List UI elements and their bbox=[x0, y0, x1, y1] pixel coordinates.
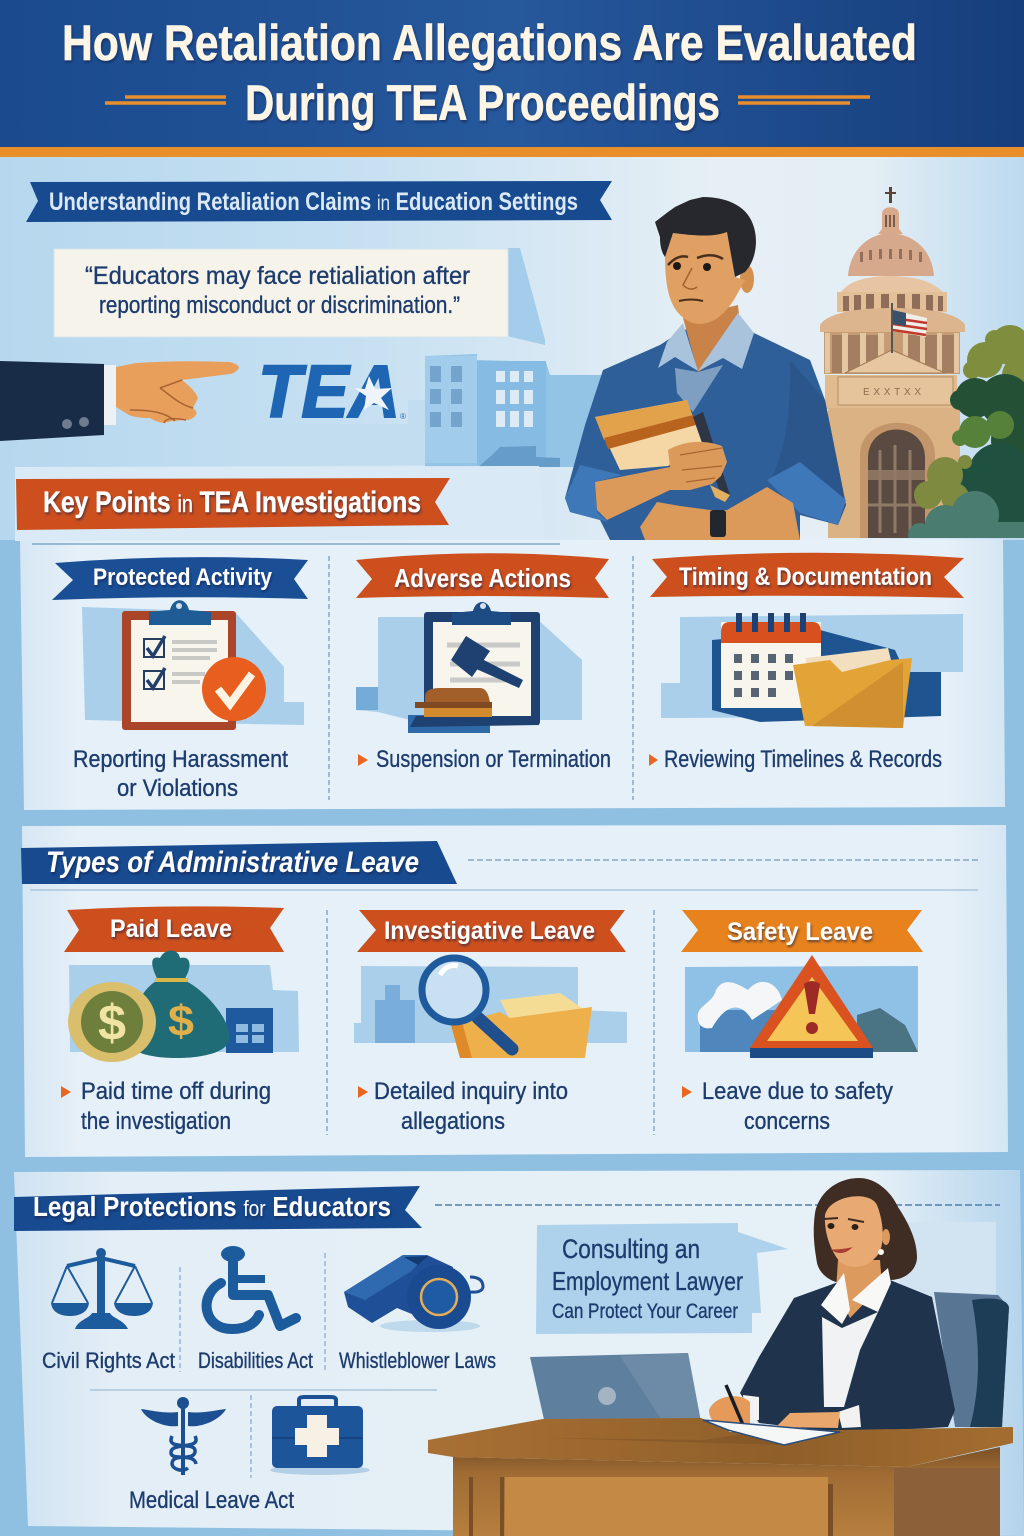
watch bbox=[710, 510, 726, 537]
blouse bbox=[822, 1312, 878, 1407]
capitol building: EXXTXX bbox=[863, 387, 921, 398]
ribbon bbox=[650, 553, 964, 598]
face bbox=[665, 230, 745, 324]
caption: Medical Leave Act bbox=[129, 1487, 294, 1514]
collar bbox=[658, 313, 754, 371]
caption: Whistleblower Laws bbox=[339, 1348, 496, 1373]
TEA logo: ® bbox=[400, 412, 406, 421]
caption: or Violations bbox=[117, 775, 238, 802]
caption: Disabilities Act bbox=[198, 1348, 313, 1373]
column: adverse actions bbox=[356, 553, 611, 773]
neck bbox=[836, 1260, 882, 1318]
caption: Leave due to safety bbox=[702, 1078, 893, 1105]
ear bbox=[740, 265, 754, 293]
callout: consulting a lawyer: Can Protect Your Career bbox=[552, 1300, 738, 1323]
section ribbon: understanding retaliation claims: Understanding Retaliation Claims in Education Settings bbox=[49, 188, 578, 216]
ribbon bbox=[681, 910, 923, 952]
title header bbox=[0, 0, 1024, 157]
jacket bbox=[740, 1280, 955, 1433]
icon: wheelchair bbox=[207, 1246, 296, 1329]
icon: magnifier and folder bbox=[354, 958, 627, 1058]
flag bbox=[891, 303, 893, 353]
icon: clipboard checklist bbox=[82, 600, 304, 730]
base and arch bbox=[828, 408, 960, 538]
arrow bullet bbox=[358, 1086, 368, 1098]
left cuff bbox=[565, 465, 622, 522]
ribbon: key points heading bbox=[16, 478, 450, 530]
icon: money bag and coin: $ bbox=[168, 997, 194, 1046]
face bbox=[825, 1196, 883, 1267]
icon: money bag and coin bbox=[68, 950, 299, 1062]
drum bbox=[837, 292, 947, 312]
ribbon: types heading bbox=[21, 841, 457, 884]
caption: Civil Rights Act bbox=[42, 1348, 175, 1373]
face details bbox=[668, 255, 723, 301]
quote card: “Educators may face retialiation after bbox=[85, 262, 470, 290]
arrow bullet bbox=[682, 1086, 692, 1098]
book bbox=[595, 400, 702, 470]
caption bbox=[81, 1078, 271, 1135]
column: timing and documentation bbox=[649, 553, 964, 773]
cross and lantern bbox=[885, 187, 896, 203]
man figure bbox=[565, 197, 846, 540]
background school building bbox=[240, 354, 620, 467]
caption bbox=[73, 746, 288, 802]
ribbon: Adverse Actions bbox=[394, 563, 571, 593]
collar bbox=[821, 1268, 891, 1324]
caption bbox=[702, 1078, 893, 1135]
ribbon bbox=[52, 557, 308, 600]
entablature bbox=[825, 375, 957, 409]
icon: scales of justice bbox=[51, 1248, 153, 1329]
dome bbox=[848, 233, 934, 276]
panel: key points bbox=[20, 539, 1005, 810]
icon: caduceus bbox=[141, 1397, 226, 1475]
title header: During TEA Proceedings bbox=[245, 75, 720, 131]
icon: clipboard with gavel bbox=[356, 602, 582, 733]
right cuff bbox=[767, 462, 846, 525]
icon: first aid kit bbox=[270, 1397, 370, 1475]
caption: Reporting Harassment bbox=[73, 746, 288, 773]
icon: money bag and coin: $ bbox=[98, 995, 126, 1051]
icon: warning triangle bbox=[685, 955, 918, 1058]
lower arm bbox=[640, 487, 800, 540]
section ribbon: understanding retaliation claims bbox=[26, 181, 612, 222]
ribbon text: Investigative Leave bbox=[384, 917, 595, 945]
callout: consulting a lawyer: Consulting an bbox=[562, 1234, 700, 1264]
column: investigative leave bbox=[354, 910, 627, 1135]
tree bbox=[908, 325, 1024, 548]
ribbon text: Paid Leave bbox=[110, 915, 232, 943]
notepad bbox=[703, 1420, 840, 1445]
panel: legal protections bbox=[14, 1170, 1024, 1536]
ribbon bbox=[357, 910, 626, 952]
caption bbox=[374, 1078, 568, 1135]
TEA logo: TEA bbox=[258, 350, 400, 433]
ribbon: Timing & Documentation bbox=[679, 563, 932, 591]
column: paid leave bbox=[61, 906, 299, 1135]
callout: consulting a lawyer bbox=[536, 1223, 788, 1334]
arrow bullet bbox=[649, 754, 658, 766]
upper sky wash bbox=[0, 155, 1024, 540]
ribbon text: Safety Leave bbox=[727, 918, 873, 946]
quote card bbox=[54, 248, 545, 345]
ribbon bbox=[64, 906, 284, 952]
capitol building bbox=[820, 187, 965, 538]
caption: concerns bbox=[744, 1108, 830, 1135]
upper arm and hand bbox=[595, 442, 727, 520]
colonnade bbox=[824, 332, 960, 374]
inner shirt bbox=[675, 365, 723, 412]
column: protected activity bbox=[52, 557, 308, 802]
icon: calendar and folder bbox=[661, 613, 963, 728]
laptop bbox=[530, 1353, 732, 1440]
shirt body bbox=[565, 320, 846, 540]
pediment bbox=[845, 350, 945, 373]
ribbon: key points heading: Key Points in TEA Investigations bbox=[43, 486, 421, 519]
caption: Suspension or Termination bbox=[376, 746, 611, 773]
arrow bullet bbox=[358, 754, 368, 766]
panel: key points top tab bbox=[15, 466, 545, 541]
office chair bbox=[934, 1292, 1009, 1427]
cuffs bbox=[743, 1395, 861, 1428]
ribbon: legal heading: Legal Protections for Educators bbox=[33, 1191, 391, 1222]
caption: Paid time off during bbox=[81, 1078, 271, 1105]
caption: allegations bbox=[401, 1108, 505, 1135]
caption: Reviewing Timelines & Records bbox=[664, 746, 942, 773]
quote card: reporting misconduct or discrimination.” bbox=[99, 292, 460, 319]
pointing hand bbox=[0, 361, 239, 441]
hair bbox=[814, 1178, 917, 1282]
icon: whistle bbox=[344, 1255, 483, 1332]
woman figure bbox=[709, 1178, 955, 1433]
arrow bullet bbox=[61, 1086, 71, 1098]
ribbon: legal heading bbox=[14, 1186, 422, 1231]
column: safety leave bbox=[681, 910, 923, 1135]
caption: Detailed inquiry into bbox=[374, 1078, 568, 1105]
desk bbox=[428, 1418, 1013, 1536]
pen bbox=[726, 1385, 743, 1425]
ribbon: Protected Activity bbox=[93, 564, 273, 591]
hands bbox=[709, 1396, 750, 1427]
panel: types of administrative leave bbox=[22, 825, 1008, 1157]
callout: consulting a lawyer: Employment Lawyer bbox=[552, 1266, 743, 1296]
ribbon: types heading: Types of Administrative Leave bbox=[46, 846, 419, 879]
ribbon bbox=[356, 553, 609, 598]
neck bbox=[683, 305, 742, 372]
caption: the investigation bbox=[81, 1108, 231, 1135]
hair bbox=[655, 197, 756, 277]
